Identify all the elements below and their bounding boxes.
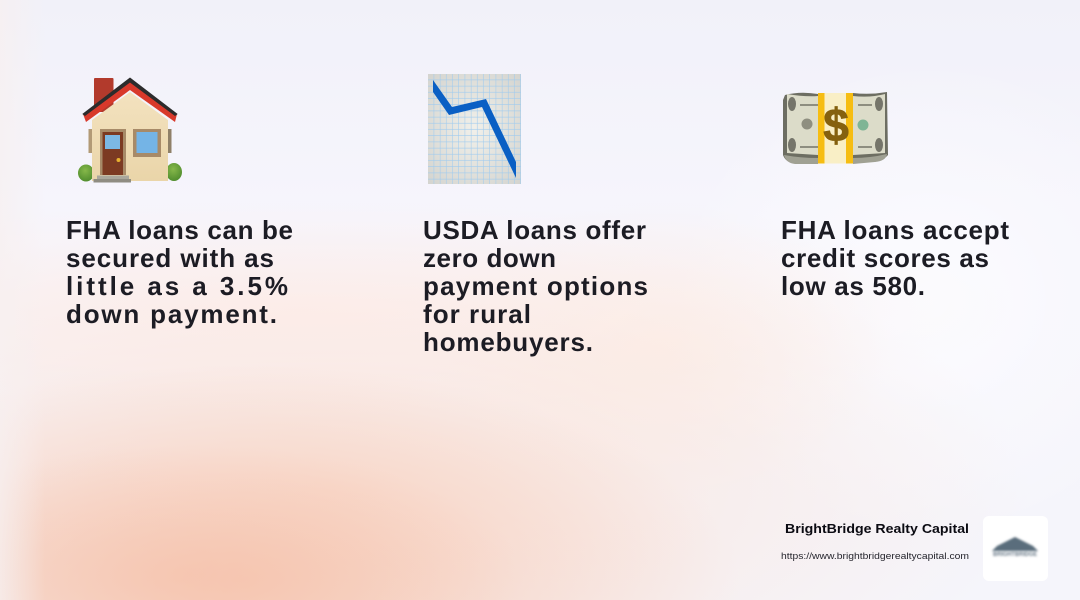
text block: USDA zero down: USDA loans offer — [423, 215, 646, 245]
logo mark: roof — [992, 537, 1038, 551]
footer: website url: https://www.brightbridgerealtycapital.com — [781, 551, 969, 562]
icon glyph: dollar sign: $ — [823, 99, 849, 151]
logo card — [983, 516, 1048, 581]
text block: FHA down payment: little as a 3.5% — [66, 271, 288, 301]
text block: FHA credit scores: low as 580. — [781, 271, 925, 301]
text block: USDA zero down: payment options — [423, 271, 648, 301]
text block: FHA down payment: FHA loans can be — [66, 215, 293, 245]
text block: USDA zero down: zero down — [423, 243, 556, 273]
text block: FHA down payment — [66, 215, 293, 329]
text block: FHA down payment: down payment. — [66, 299, 277, 329]
text block: FHA credit scores: FHA loans accept — [781, 215, 1009, 245]
logo wordmark: BRIGHTBRIDGE — [993, 552, 1037, 558]
icon: house — [78, 78, 182, 182]
icon: chart with falling line — [428, 74, 521, 184]
text block: FHA down payment: secured with as — [66, 243, 274, 273]
text block: USDA zero down: for rural — [423, 299, 531, 329]
text block: FHA credit scores: credit scores as — [781, 243, 989, 273]
text block: FHA credit scores — [781, 215, 1009, 301]
text block: USDA zero down: homebuyers. — [423, 327, 593, 357]
icon: banded stack of money — [783, 92, 888, 164]
text block: USDA zero down — [423, 215, 648, 357]
footer: company name: BrightBridge Realty Capital — [785, 521, 969, 536]
